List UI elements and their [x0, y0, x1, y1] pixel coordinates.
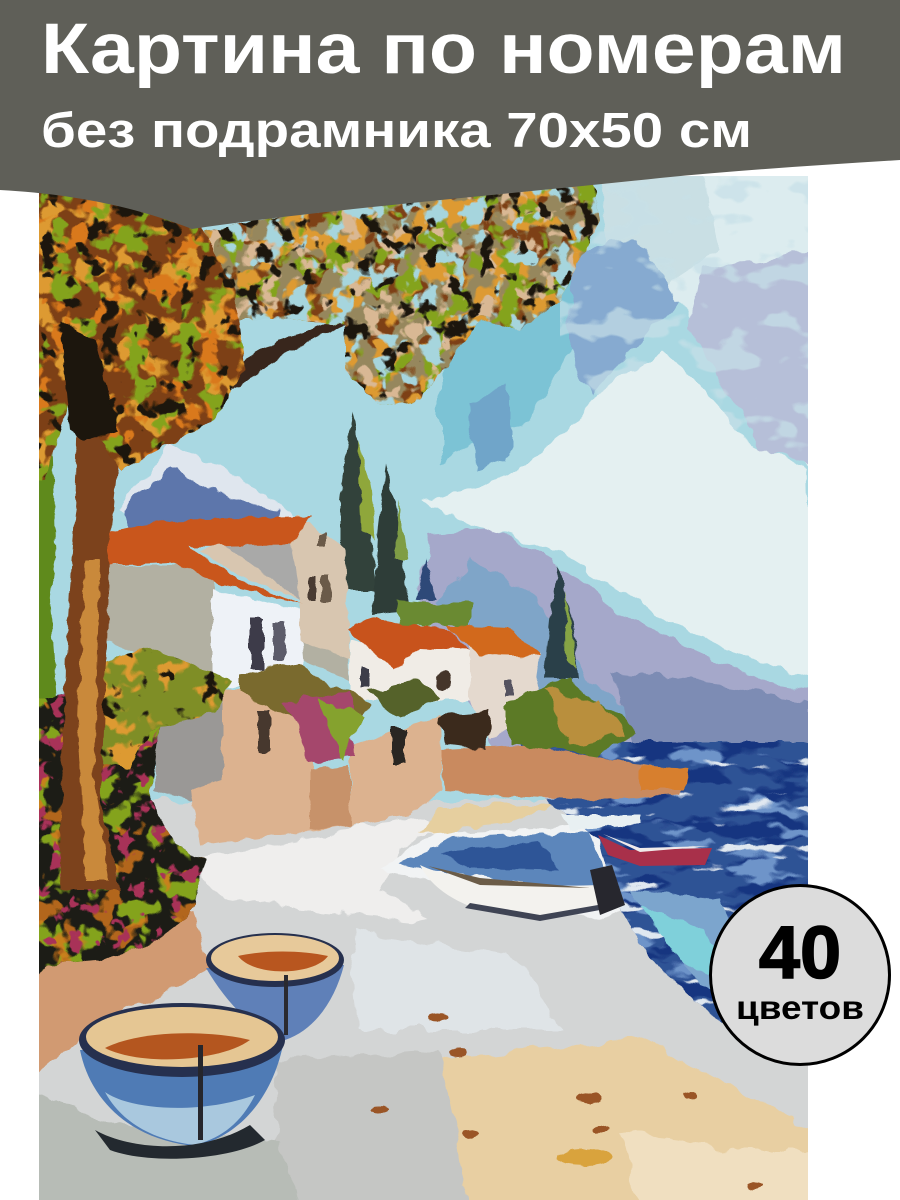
sand flecks [372, 1013, 764, 1189]
tree foliage [39, 184, 600, 480]
sky mottling [560, 176, 808, 476]
painting: seaside village [20, 160, 830, 1200]
white cloud [420, 350, 815, 680]
lower-left bushes [39, 648, 232, 974]
mountains [120, 440, 815, 760]
cypress trees [340, 410, 580, 680]
rocks and wall [155, 690, 690, 845]
white boat [420, 865, 600, 916]
sky [20, 160, 830, 800]
lagoon and sea [390, 739, 808, 1024]
shrubs and flowers [240, 600, 640, 760]
upper rowing boat [206, 965, 344, 1040]
lower rowing boat [80, 1040, 284, 1146]
subtitle: без подрамника 70х50 см [41, 104, 752, 158]
houses [105, 515, 540, 740]
badge label: цветов [736, 989, 864, 1026]
header banner [0, 0, 900, 229]
red boat [598, 835, 712, 866]
boats at the shore [79, 834, 712, 1159]
left edge foliage strip [39, 453, 57, 698]
dark upper trunk [60, 320, 118, 440]
large tree trunk and branches [60, 315, 352, 890]
beach [20, 800, 830, 1200]
title: Картина по номерам [41, 10, 846, 89]
badge number: 40 [759, 911, 841, 994]
painting base [39, 176, 808, 1200]
badge: 40 colours [710, 886, 890, 1064]
